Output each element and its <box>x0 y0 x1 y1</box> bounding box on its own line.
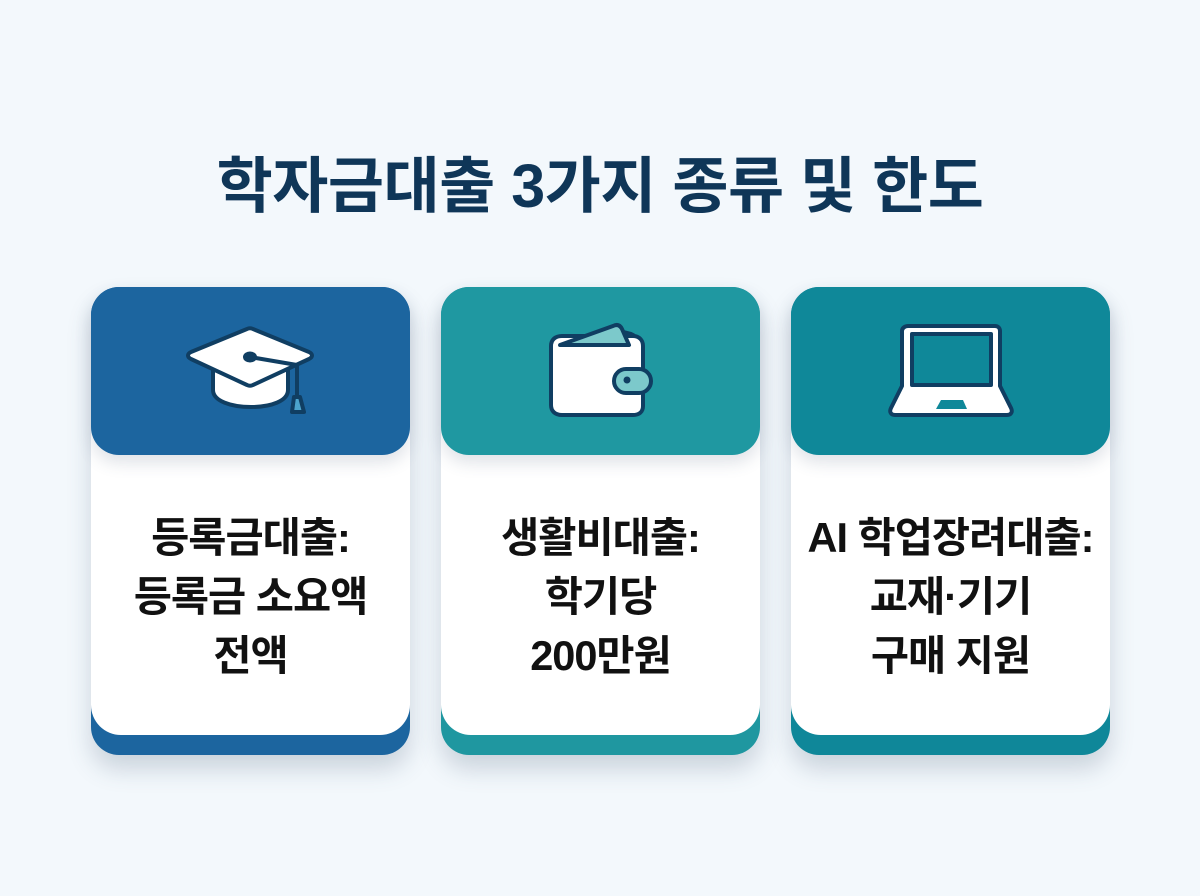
panel: tuition loan <box>91 287 410 755</box>
icon: wallet <box>549 322 653 417</box>
label: 200만원 <box>530 632 671 679</box>
label: 등록금 소요액 <box>134 573 367 620</box>
card header <box>91 287 410 455</box>
card header <box>441 287 760 455</box>
label: 구매 지원 <box>871 632 1030 679</box>
panel: AI study loan <box>791 287 1110 755</box>
label: 학기당 <box>545 573 656 620</box>
card body <box>91 387 410 735</box>
label: 등록금대출: <box>151 514 350 561</box>
label: 전액 <box>213 632 288 679</box>
card body <box>441 387 760 735</box>
label: 생활비대출: <box>501 514 700 561</box>
label: AI 학업장려대출: <box>808 514 1093 561</box>
title: 학자금대출 3가지 종류 및 한도 <box>217 152 983 220</box>
icon: laptop <box>888 324 1014 417</box>
label <box>134 514 367 679</box>
icon: graduation cap <box>186 326 314 414</box>
label <box>808 514 1093 679</box>
panel: living expense loan <box>441 287 760 755</box>
card body <box>791 387 1110 735</box>
label: 교재·기기 <box>870 573 1031 620</box>
card header <box>791 287 1110 455</box>
label <box>501 514 700 679</box>
